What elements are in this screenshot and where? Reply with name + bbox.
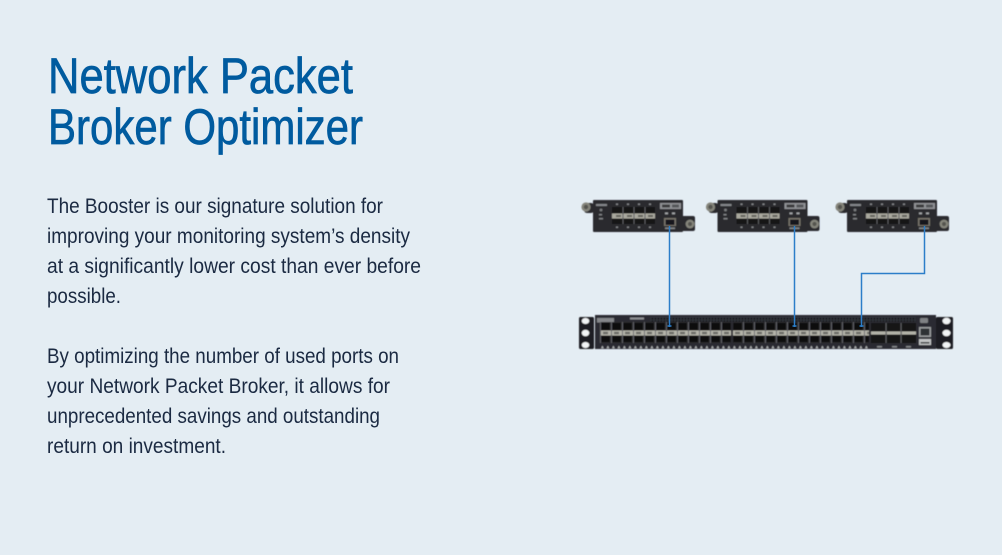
text block: booster description: improving your monitoring system’s density	[47, 225, 410, 248]
text block: booster description: The Booster is our signature solution for	[47, 195, 383, 218]
booster module 2	[706, 200, 820, 232]
port markers	[600, 345, 869, 349]
text block: booster description	[47, 195, 421, 308]
title: Broker Optimizer	[48, 99, 363, 155]
left rack ear	[579, 317, 594, 349]
text block: savings description: unprecedented savings and outstanding	[47, 405, 380, 428]
text block: savings description: return on investment.	[47, 435, 226, 458]
text block: savings description	[47, 345, 399, 458]
network packet broker switch	[579, 315, 953, 349]
switch chassis	[595, 315, 936, 349]
booster module 3	[835, 200, 949, 232]
SFP port group 2	[733, 322, 869, 343]
text block: savings description: By optimizing the number of used ports on	[47, 345, 399, 368]
right rack ear	[936, 317, 953, 349]
network diagram	[579, 200, 953, 349]
connection line: module 1 to switch	[668, 226, 672, 327]
connection line: module 3 to switch	[860, 226, 924, 327]
management ports	[919, 318, 931, 345]
title	[48, 48, 363, 155]
text block: booster description: at a significantly lower cost than ever before	[47, 255, 421, 278]
SFP port group 1	[600, 322, 731, 343]
text block: booster description: possible.	[47, 285, 121, 308]
connection line: module 2 to switch	[792, 226, 796, 327]
text block: savings description: your Network Packet Broker, it allows for	[47, 375, 390, 398]
booster module 1	[581, 200, 695, 232]
title: Network Packet	[48, 48, 353, 104]
QSFP ports	[871, 323, 916, 348]
